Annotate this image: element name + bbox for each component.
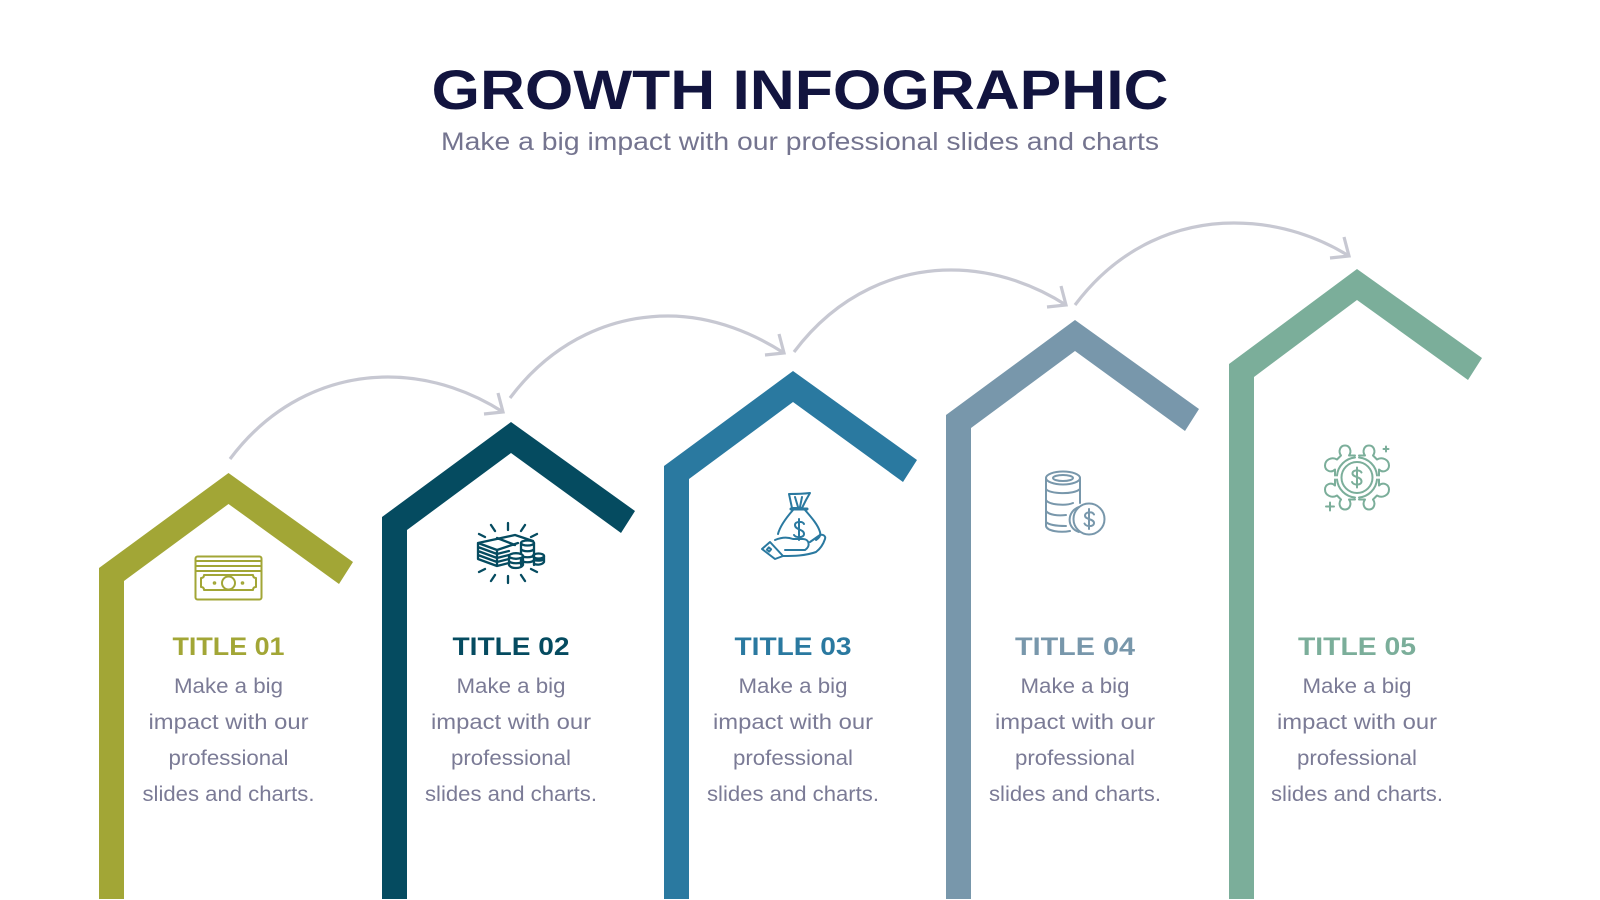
title: GROWTH INFOGRAPHIC: [432, 58, 1168, 121]
description 5: impact with our: [1277, 711, 1437, 734]
description 2: slides and charts.: [425, 783, 597, 806]
description 3: slides and charts.: [707, 783, 879, 806]
heading 4: TITLE 04: [1015, 633, 1135, 661]
heading 2: TITLE 02: [452, 633, 570, 661]
panel: step 3: [664, 371, 917, 899]
panel: step 4: [946, 320, 1199, 899]
description 5: slides and charts.: [1271, 783, 1443, 806]
description 5: Make a big: [1302, 675, 1412, 698]
description 2: impact with our: [431, 711, 591, 734]
description 3: Make a big: [738, 675, 848, 698]
description 2: [425, 675, 597, 806]
arrow: step 2 to 3: [510, 316, 784, 398]
description 2: professional: [451, 747, 571, 770]
description 1: Make a big: [174, 675, 283, 698]
description 5: professional: [1297, 747, 1417, 770]
description 1: [142, 675, 314, 806]
panel: step 2: [382, 422, 635, 899]
description 4: slides and charts.: [989, 783, 1161, 806]
description 4: [989, 675, 1161, 806]
house outline 3: [664, 371, 917, 899]
arrow: step 4 to 5: [1075, 223, 1349, 305]
icon: puzzle dollar: [1325, 446, 1389, 510]
icon: money bag in hand: [762, 493, 825, 559]
description 4: Make a big: [1020, 675, 1130, 698]
heading 1: TITLE 01: [172, 633, 285, 661]
description 1: impact with our: [148, 711, 309, 734]
description 4: impact with our: [995, 711, 1155, 734]
arrow: step 1 to 2: [230, 377, 503, 459]
icon: money stacks: [478, 523, 544, 583]
description 2: Make a big: [456, 675, 566, 698]
subtitle: Make a big impact with our professional slides and charts: [441, 128, 1159, 156]
description 1: slides and charts.: [142, 783, 314, 806]
heading 5: TITLE 05: [1298, 633, 1416, 661]
arrow: step 3 to 4: [794, 270, 1066, 352]
description 3: impact with our: [713, 711, 873, 734]
description 4: professional: [1015, 747, 1135, 770]
icon: coin stack: [1046, 472, 1104, 534]
icon: banknote: [196, 556, 262, 600]
description 3: professional: [733, 747, 853, 770]
house outline 5: [1229, 269, 1482, 899]
house outline 1: [99, 473, 353, 899]
house outline 2: [382, 422, 635, 899]
description 3: [707, 675, 879, 806]
description 1: professional: [168, 747, 288, 770]
panel: step 1: [99, 473, 353, 899]
panel: step 5: [1229, 269, 1482, 899]
house outline 4: [946, 320, 1199, 899]
heading 3: TITLE 03: [734, 633, 852, 661]
description 5: [1271, 675, 1443, 806]
